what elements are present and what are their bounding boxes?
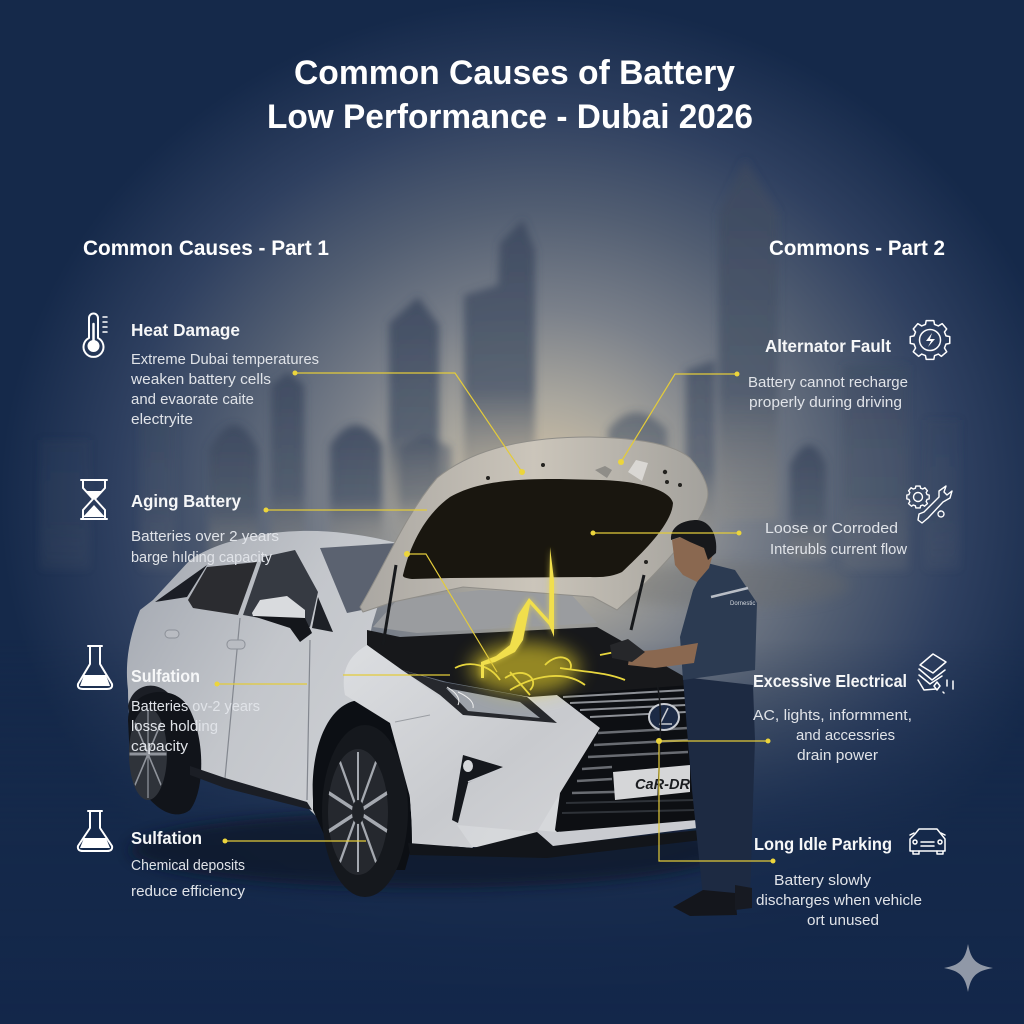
left item: heat damage: Extreme Dubai temperatures bbox=[131, 351, 319, 368]
sill bbox=[190, 766, 312, 810]
right item: alternator fault: Battery cannot recharge bbox=[748, 374, 908, 391]
number plate: CaR-DR bbox=[635, 776, 690, 793]
grille emblem bbox=[649, 704, 679, 730]
title: Common Causes of Battery bbox=[294, 54, 735, 92]
leader line: excessive electrical bbox=[656, 738, 770, 744]
right item: excessive electrical: drain power bbox=[797, 747, 878, 764]
blurred Dubai skyline bbox=[40, 160, 960, 570]
icon: car bbox=[910, 829, 945, 854]
right item: alternator fault: Alternator Fault bbox=[765, 336, 891, 356]
right item: alternator fault: properly during driving bbox=[749, 394, 902, 411]
diagnostic tablet bbox=[610, 639, 645, 662]
rear wheel bbox=[128, 692, 201, 814]
headlight bbox=[402, 670, 557, 723]
hood latch bbox=[595, 466, 612, 478]
right item: long idle parking: Long Idle Parking bbox=[754, 834, 892, 854]
right item: excessive electrical: and accessries bbox=[796, 727, 895, 744]
forearm bbox=[628, 643, 698, 668]
fog lamp bbox=[452, 755, 503, 823]
left item: heat damage: weaken battery cells bbox=[130, 371, 271, 388]
leader line: aging battery bbox=[264, 508, 427, 512]
rear door window bbox=[188, 562, 257, 615]
icon: flask bbox=[78, 646, 112, 689]
heading: part 2: Commons - Part 2 bbox=[769, 237, 945, 260]
windscreen side bbox=[320, 543, 397, 613]
right item: loose or corroded: Loose or Corroded bbox=[765, 520, 898, 537]
lightning bolt bbox=[481, 547, 554, 678]
shirt logo text: Dornestic bbox=[730, 601, 755, 607]
shoes bbox=[673, 890, 737, 916]
left item: sulfation: Batteries ov-2 years bbox=[131, 698, 260, 715]
heading: part 1: Common Causes - Part 1 bbox=[83, 237, 329, 260]
leader line: sulfation bbox=[214, 675, 450, 686]
hood holes bbox=[486, 463, 682, 564]
right item: excessive electrical: AC, lights, informment, bbox=[753, 707, 912, 724]
leader line: sulfation two bbox=[222, 838, 366, 844]
hood insulation liner bbox=[403, 479, 673, 579]
icon: flask two bbox=[78, 811, 112, 851]
front wheel bbox=[322, 725, 408, 897]
shirt stripe bbox=[711, 588, 748, 597]
left item: sulfation: losse holding bbox=[131, 718, 218, 735]
front door window bbox=[243, 550, 318, 627]
rear quarter window bbox=[155, 565, 207, 602]
right item: loose or corroded: Interubls current flow bbox=[770, 541, 907, 558]
grille bbox=[555, 685, 697, 832]
leader line: hood to engine bbox=[404, 551, 497, 672]
hood struts bbox=[383, 565, 644, 645]
windscreen bbox=[373, 590, 597, 633]
right item: long idle parking: discharges when vehicle bbox=[756, 892, 922, 909]
hood underside frame bbox=[360, 437, 708, 612]
rear shoe bbox=[735, 885, 752, 910]
door handles bbox=[165, 630, 245, 649]
icon: hourglass bbox=[81, 480, 107, 519]
leader line: alternator bbox=[618, 372, 740, 465]
title: Low Performance - Dubai 2026 bbox=[267, 98, 753, 136]
fender crease bbox=[395, 715, 430, 722]
front bumper bbox=[344, 645, 600, 848]
left item: sulfation two: Chemical deposits bbox=[131, 857, 245, 874]
icon: sparkle watermark bbox=[944, 944, 993, 992]
left item: sulfation two: Sulfation bbox=[131, 828, 202, 848]
left item: sulfation: Sulfation bbox=[131, 666, 200, 686]
shirt bbox=[680, 563, 757, 680]
small quarter glass bbox=[312, 597, 333, 632]
car body bbox=[127, 531, 600, 850]
door seams bbox=[225, 618, 310, 800]
right item: long idle parking bbox=[754, 829, 945, 929]
icon: stacked devices bbox=[918, 654, 953, 693]
left item: sulfation two: reduce efficiency bbox=[131, 883, 245, 900]
right item: excessive electrical bbox=[753, 654, 953, 764]
left item: aging battery bbox=[81, 480, 279, 566]
bumper lower lip bbox=[408, 830, 702, 858]
icon: thermometer bbox=[84, 314, 107, 357]
tablet cable bbox=[656, 680, 660, 800]
rear wheel arch bbox=[128, 686, 182, 767]
trousers bbox=[683, 677, 755, 897]
left item: sulfation bbox=[78, 646, 260, 755]
ground shadow bbox=[130, 812, 730, 888]
left item: aging battery: barge hılding capacity bbox=[131, 549, 272, 566]
left item: heat damage: and evaorate caite bbox=[131, 391, 254, 408]
left item: heat damage: Heat Damage bbox=[131, 320, 240, 340]
electrical spark glow bbox=[455, 642, 625, 695]
mechanic bbox=[610, 520, 757, 916]
left item: sulfation: capacity bbox=[131, 738, 188, 755]
left item: heat damage: electryite bbox=[131, 411, 193, 428]
right item: long idle parking: ort unused bbox=[807, 912, 879, 929]
hood label bbox=[628, 460, 648, 481]
right item: loose or corroded bbox=[765, 486, 952, 558]
wing mirror bbox=[252, 596, 305, 620]
left item: aging battery: Batteries over 2 years bbox=[131, 528, 279, 545]
leader line: loose or corroded bbox=[590, 530, 742, 536]
engine bay bbox=[367, 627, 685, 697]
car illustration bbox=[127, 437, 730, 897]
number plate bbox=[613, 765, 690, 800]
title bbox=[267, 54, 753, 136]
front wheel arch bbox=[313, 700, 412, 870]
left item: heat damage bbox=[84, 314, 319, 428]
right item: excessive electrical: Excessive Electrical bbox=[753, 671, 907, 691]
left item: aging battery: Aging Battery bbox=[131, 491, 241, 511]
right item: long idle parking: Battery slowly bbox=[774, 872, 871, 889]
head and neck bbox=[671, 520, 716, 582]
icon: gear and wrench bbox=[907, 486, 952, 523]
ground and road haze bbox=[0, 563, 1024, 1024]
left item: sulfation two bbox=[78, 811, 245, 900]
icon: gear with bolt bbox=[910, 321, 950, 359]
leader line: heat damage bbox=[292, 370, 525, 475]
leader line: long idle parking bbox=[659, 741, 776, 864]
right item: alternator fault bbox=[748, 321, 950, 411]
